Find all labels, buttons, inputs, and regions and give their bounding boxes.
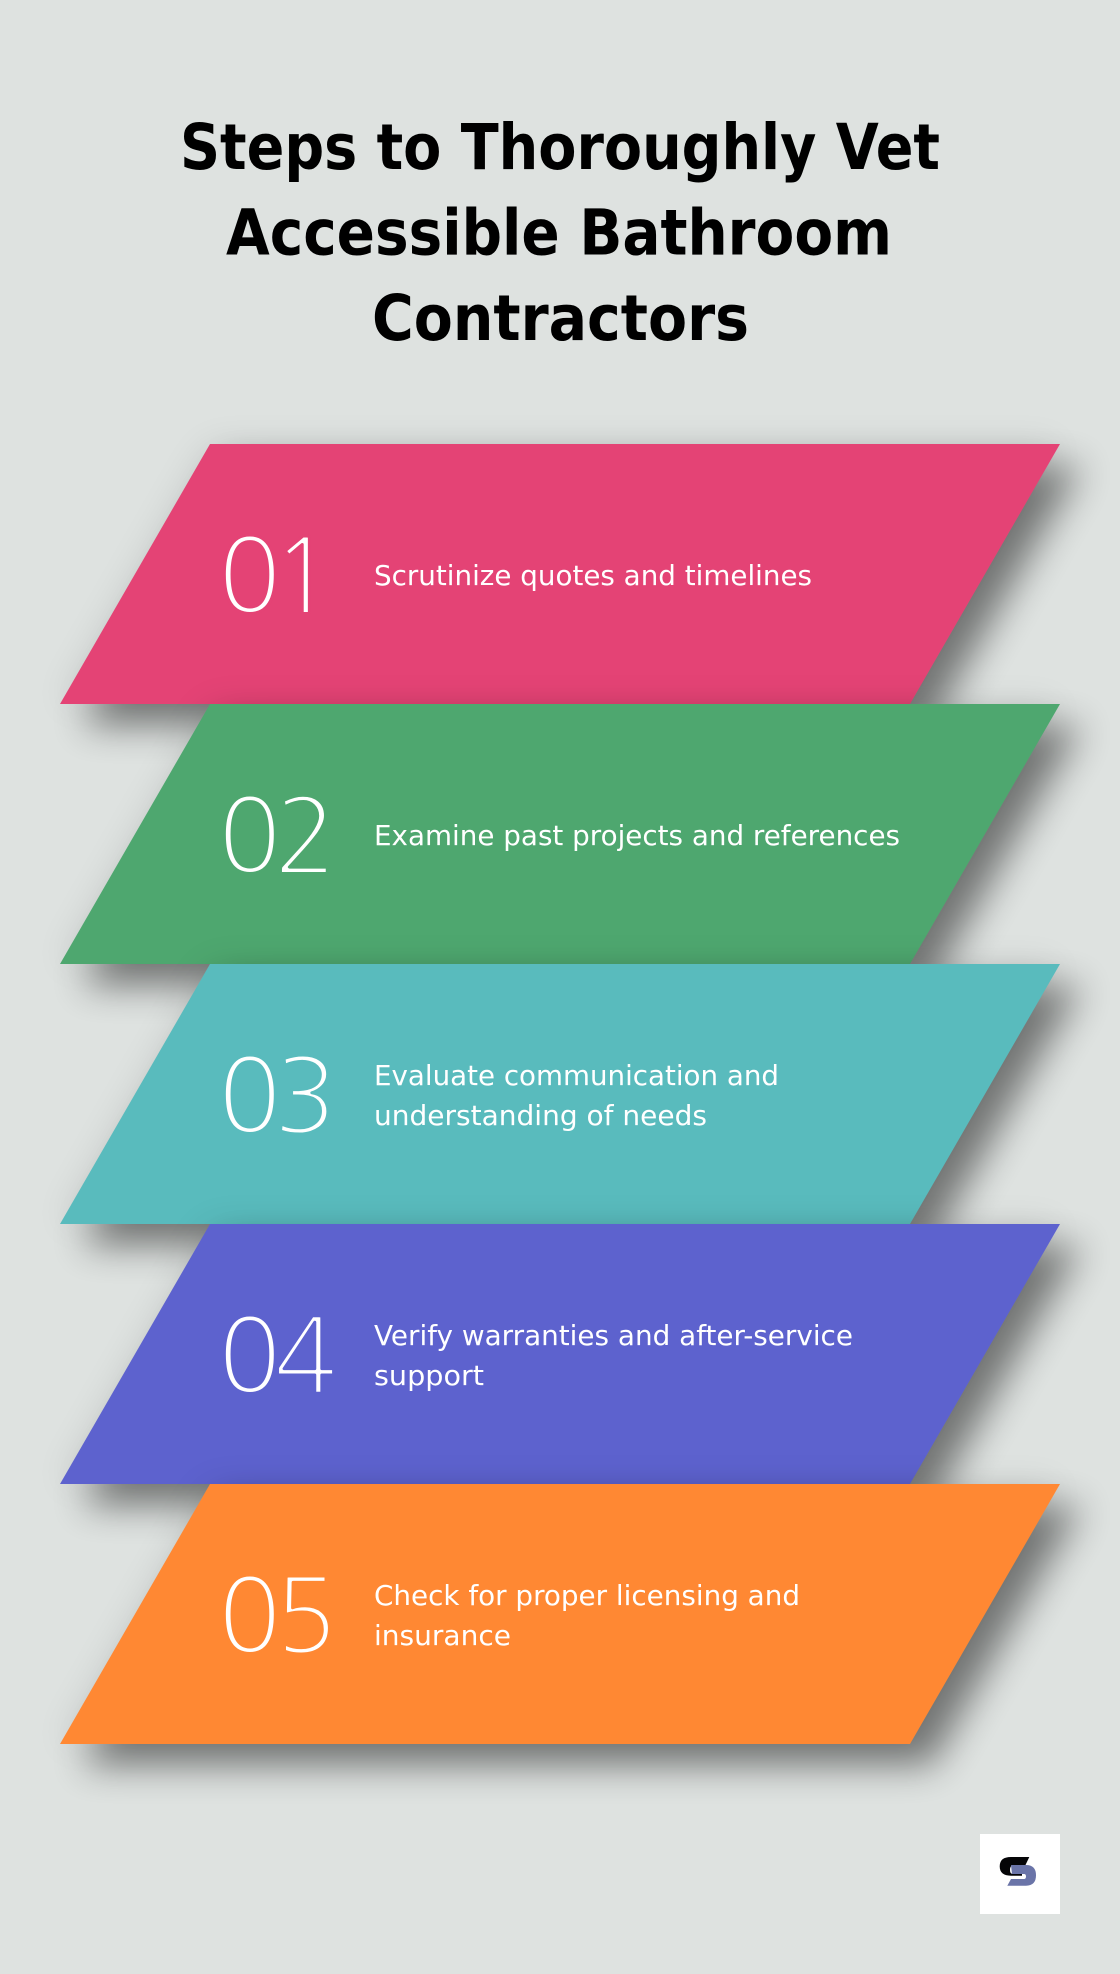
text: step 01: Scrutinize quotes and timelines xyxy=(374,560,812,592)
text: step 03: understanding of needs xyxy=(374,1100,707,1132)
title: Accessible Bathroom xyxy=(226,196,892,270)
title: Contractors xyxy=(372,282,749,355)
text: step 03 xyxy=(374,1060,779,1132)
number 05: 0 xyxy=(218,1564,281,1668)
band: step 01 pink xyxy=(60,444,1060,704)
title: Steps to Thoroughly Vet xyxy=(180,111,940,184)
text: step 03: Evaluate communication and xyxy=(374,1060,779,1092)
band: step 04 indigo xyxy=(60,1224,1060,1484)
text: step 04: Verify warranties and after-service xyxy=(374,1320,853,1352)
panel: step 04 xyxy=(60,1224,1060,1484)
text: step 02: Examine past projects and references xyxy=(374,820,900,852)
number 03: 0 xyxy=(218,1044,281,1148)
icon: logo xyxy=(980,1834,1060,1914)
number 05: 5 xyxy=(274,1564,337,1668)
number 04: 0 xyxy=(218,1304,281,1408)
title xyxy=(180,111,940,355)
number 03: 3 xyxy=(274,1044,337,1148)
band: step 05 orange xyxy=(60,1484,1060,1744)
panel: step 05 xyxy=(60,1484,1060,1744)
text: step 05 xyxy=(374,1580,800,1652)
text: step 05: insurance xyxy=(374,1620,511,1652)
number 01: 1 xyxy=(271,524,334,628)
number 01: 0 xyxy=(218,524,281,628)
band: step 03 teal xyxy=(60,964,1060,1224)
number 02: 2 xyxy=(274,784,337,888)
text: step 05: Check for proper licensing and xyxy=(374,1580,800,1612)
text: step 04: support xyxy=(374,1360,484,1392)
text: step 04 xyxy=(374,1320,853,1392)
panel: step 01 xyxy=(60,444,1060,704)
number 02: 0 xyxy=(218,784,281,888)
panel: step 02 xyxy=(60,704,1060,964)
band: step 02 green xyxy=(60,704,1060,964)
number 04: 4 xyxy=(274,1304,337,1408)
panel: step 03 xyxy=(60,964,1060,1224)
